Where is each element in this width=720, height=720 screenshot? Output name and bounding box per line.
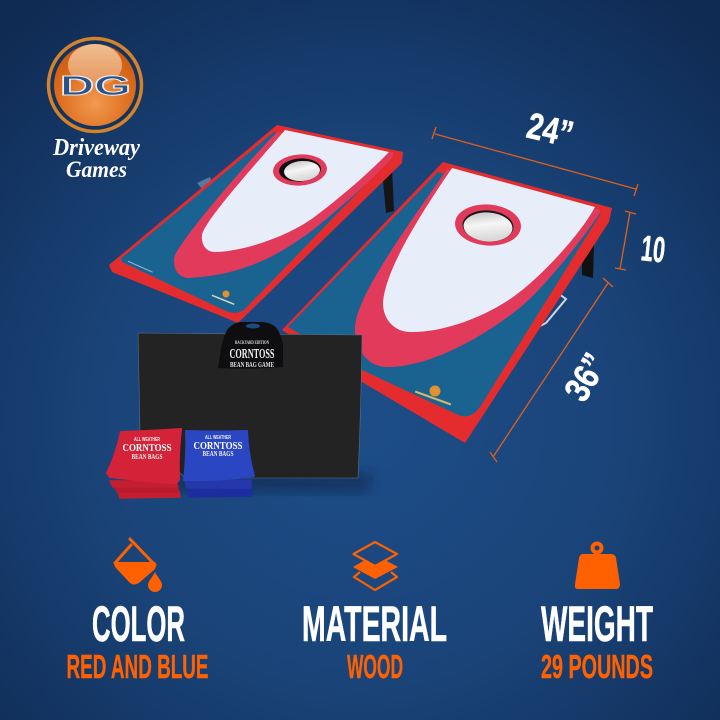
logo: Driveway Games: Driveway (52, 135, 140, 161)
logo: Driveway Games: DG (60, 70, 131, 101)
red bean bags: ALL WEATHER (134, 437, 160, 443)
red bean bags: BEAN BAGS (132, 452, 162, 461)
spec: weight (541, 596, 653, 685)
carry bag: BEAN BAG GAME (230, 360, 274, 369)
carry bag: BACKYARD EDITION (235, 341, 269, 346)
dimension: 10 inch height (615, 211, 667, 270)
spec: material: WOOD (347, 648, 403, 685)
blue bean bags (184, 431, 254, 497)
carry bag: CORNTOSS (230, 347, 275, 362)
dimension: 10 inch height: 10 (639, 227, 667, 270)
blue bean bags: BEAN BAGS (202, 449, 234, 458)
spec: material: MATERIAL (302, 596, 447, 652)
icon: paint bucket (114, 539, 162, 592)
logo: Driveway Games: Games (66, 157, 127, 182)
cornhole board: front right (282, 162, 612, 443)
dimension: 24 inch width (432, 105, 638, 196)
carry bag (138, 322, 372, 492)
dimension: 36 inch depth (490, 278, 616, 462)
blue bean bags: ALL WEATHER (205, 435, 231, 441)
dimension: 36 inch depth: 36” (556, 346, 616, 408)
blue bean bags: CORNTOSS (194, 441, 243, 452)
spec: color (66, 596, 208, 685)
spec: color: COLOR (92, 596, 185, 652)
spec: material (302, 596, 447, 685)
spec: color: RED AND BLUE (66, 648, 208, 685)
red bean bags (107, 429, 181, 498)
logo: Driveway Games (48, 38, 142, 182)
cornhole board: back left (109, 125, 403, 323)
icon: layers (353, 542, 398, 590)
dimension: 24 inch width: 24” (523, 105, 577, 155)
icon: weight (575, 544, 620, 589)
red bean bags: CORNTOSS (122, 443, 172, 454)
